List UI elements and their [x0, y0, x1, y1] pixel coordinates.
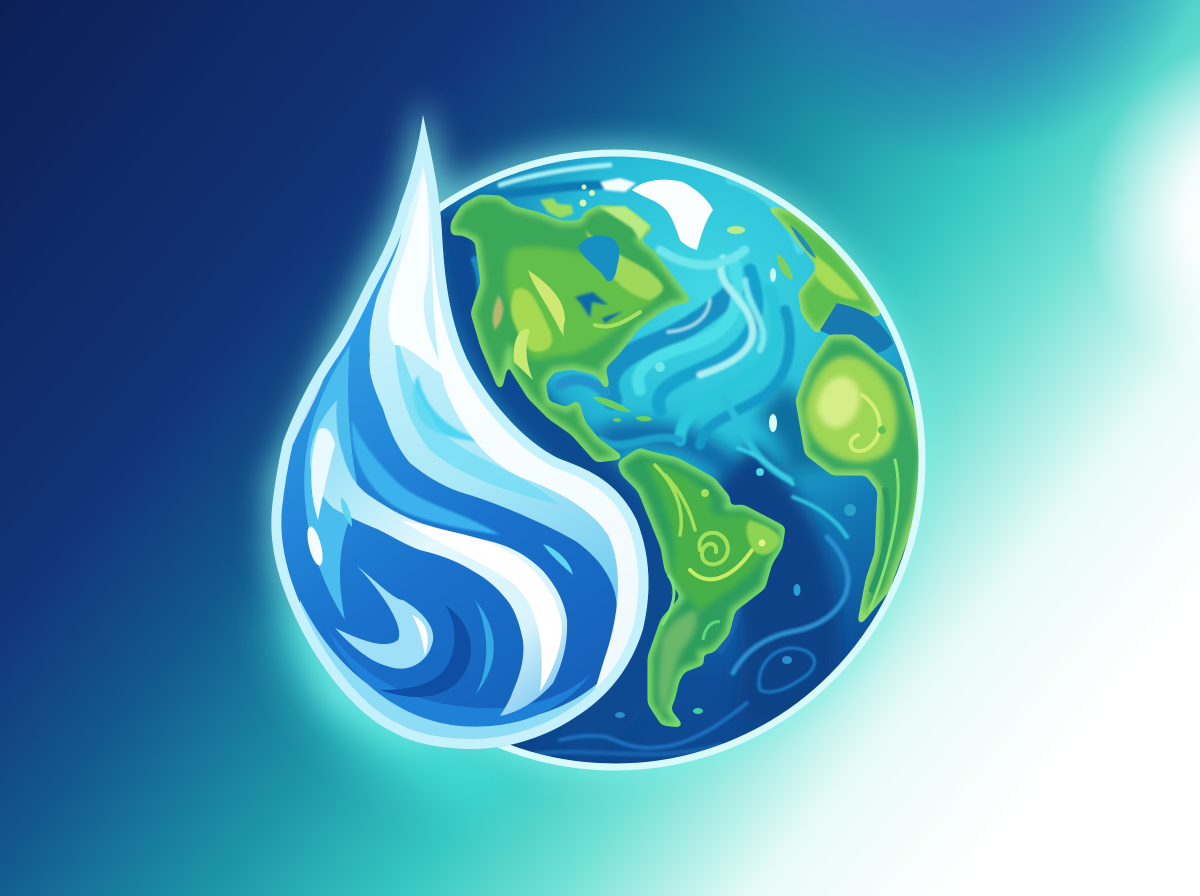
- globe rim: [440, 150, 926, 770]
- mid sky band: [352, 420, 500, 535]
- water drop: [271, 115, 650, 760]
- navy swirl: [380, 605, 471, 697]
- drop swirl bands: [293, 115, 650, 760]
- ocean currents: [475, 165, 848, 755]
- drop body: [271, 115, 649, 749]
- white central band: [388, 165, 445, 375]
- continent: Africa: [798, 337, 923, 622]
- lower S band: [310, 400, 567, 716]
- continent: Caribbean islands: [592, 397, 652, 422]
- sea: Mediterranean: [820, 303, 893, 353]
- globe detail: [453, 165, 923, 755]
- island: Iceland: [727, 226, 745, 234]
- swirl light: [335, 566, 433, 669]
- glow behind drop and globe: [272, 115, 922, 775]
- ocean dots: [615, 268, 856, 718]
- continent: South America: [620, 450, 783, 725]
- left sky band: [304, 345, 360, 620]
- continent: Europe: [770, 208, 880, 332]
- Hudson Bay: [578, 235, 619, 281]
- swirl highlight: [412, 615, 428, 655]
- globe ocean: [440, 156, 914, 764]
- bottom pale band: [300, 600, 627, 749]
- drop rim: [271, 115, 649, 749]
- white S crest: [400, 520, 562, 692]
- continent: arctic islands: [540, 178, 650, 240]
- globe: [440, 150, 926, 770]
- Great Lakes: [575, 292, 623, 323]
- white S edge: [432, 229, 638, 690]
- white left band: [311, 428, 335, 520]
- icecap: Greenland: [632, 180, 713, 250]
- turquoise wedge: [412, 374, 476, 443]
- dark ocean shading: [455, 210, 810, 750]
- drop highlight: [304, 525, 326, 567]
- cyan slivers: [543, 544, 573, 575]
- upper light band: [369, 115, 649, 700]
- continent: North America: [453, 197, 688, 460]
